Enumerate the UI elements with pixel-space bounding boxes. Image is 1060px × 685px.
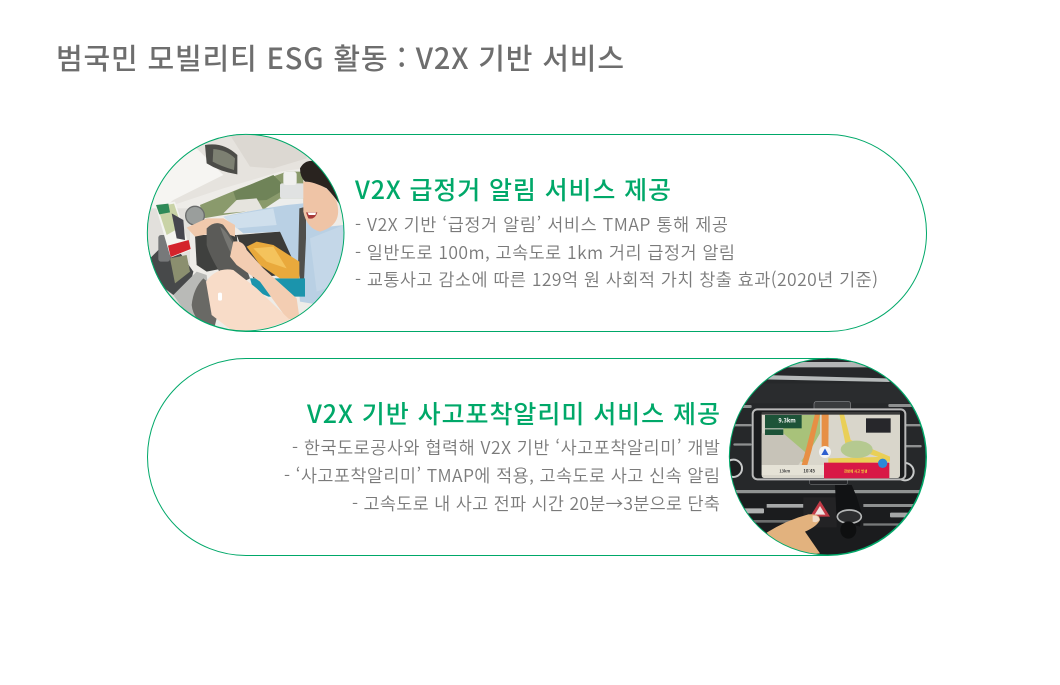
ceiling: [152, 136, 311, 208]
photo: phone navigation on dashboard: 전방에 사고 발생: [844, 468, 867, 473]
bullet text block: - 고속도로 내 사고 전파 시간 20분→3분으로 단축: [352, 491, 720, 516]
photo: driver pointing at phone in car: [146, 134, 344, 331]
bullet text block: [284, 435, 720, 516]
panel: V2X accident detection alert service: [148, 350, 935, 565]
driver hands: [230, 241, 300, 322]
seat belt: [298, 207, 306, 278]
side buttons: [733, 404, 922, 447]
info panel: [866, 418, 891, 433]
window: [200, 172, 303, 218]
bullet text block: [355, 212, 878, 292]
lower dash: [174, 272, 208, 317]
photo: phone navigation on dashboard: 13km: [779, 468, 790, 474]
photo: phone navigation on dashboard: 9.3km: [778, 416, 796, 425]
dash left: [147, 208, 190, 308]
top status bar: [762, 412, 900, 415]
dark interior: [236, 232, 292, 278]
guidance panel: [765, 415, 802, 428]
top vent lines: [788, 362, 868, 368]
bullet text block: - 한국도로공사와 협력해 V2X 기반 ‘사고포착알리미’ 개발: [292, 435, 720, 460]
lower dash: [730, 490, 927, 493]
teal bag: [250, 278, 305, 297]
heading: accident detection alert: V2X 기반 사고포착알리미 서비스 제공: [306, 395, 720, 431]
bullet text block: - ‘사고포착알리미’ TMAP에 적용, 고속도로 사고 신속 알림: [284, 463, 720, 488]
heading: sudden stop alert: V2X 급정거 알림 서비스 제공: [354, 171, 671, 207]
position marker: [819, 446, 831, 458]
man shirt: [223, 203, 344, 305]
map: [783, 415, 820, 463]
photo: phone navigation on dashboard: 10:45: [803, 469, 815, 475]
alert bar: [762, 465, 824, 475]
panel outline: [148, 358, 926, 556]
orange bag: [247, 242, 299, 278]
mount arm: [835, 485, 862, 527]
man head: [303, 182, 338, 232]
phone: [155, 202, 191, 258]
bullet text block: - 교통사고 감소에 따른 129억 원 사회적 가치 창출 효과(2020년 기준): [355, 267, 878, 292]
title: 범국민 모빌리티 ESG 활동 : V2X 기반 서비스: [56, 36, 624, 78]
finger: [767, 514, 820, 557]
phone body: [753, 409, 905, 479]
top clamp: [814, 401, 851, 408]
bullet text block: - 일반도로 100m, 고속도로 1km 거리 급정거 알림: [355, 240, 735, 265]
mirror: [205, 144, 237, 174]
hazard button: [803, 504, 804, 508]
arm and hand pointing: [187, 218, 235, 237]
panel outline: [148, 134, 926, 332]
bullet text block: - V2X 기반 ‘급정거 알림’ 서비스 TMAP 통해 제공: [355, 212, 728, 237]
panel: V2X sudden stop alert service: [140, 125, 926, 340]
steering wheel: [206, 223, 250, 280]
photo: phone navigation on dashboard: [728, 358, 926, 555]
